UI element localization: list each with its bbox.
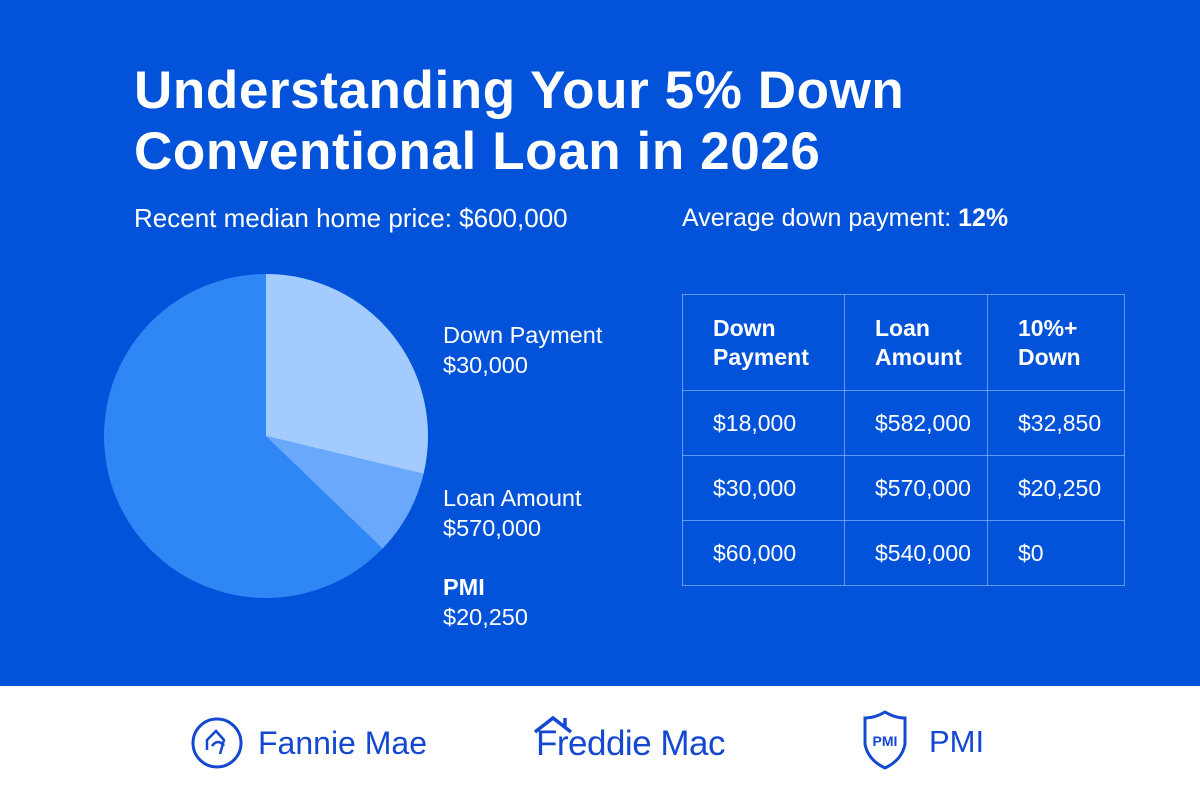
- logo: Fannie Mae: [192, 718, 427, 768]
- table: $0: [1018, 540, 1044, 566]
- logo: Fannie Mae: Fannie Mae: [258, 725, 427, 761]
- logo: PMI: PMI: [873, 733, 897, 749]
- table: $540,000: [875, 540, 971, 566]
- table: [682, 294, 1125, 586]
- table: Down: [1018, 344, 1081, 370]
- label: PMI: $20,250: [443, 604, 528, 630]
- stat: median home price: Recent median home price: $600,000: [134, 203, 568, 233]
- logo: Freddie Mac: Freddie Mac: [536, 724, 725, 763]
- table: Down: [713, 314, 776, 340]
- table: Amount: [875, 344, 962, 370]
- table: Payment: [713, 344, 809, 370]
- table: 10%+: [1018, 314, 1077, 340]
- pie chart: [104, 274, 428, 598]
- table: $30,000: [713, 474, 796, 500]
- label: PMI: PMI: [443, 574, 485, 600]
- label: down payment: $30,000: [443, 352, 528, 378]
- logo: PMI: [864, 710, 984, 770]
- title: Understanding Your 5% Down: [134, 61, 904, 120]
- logo: PMI: PMI: [929, 724, 984, 759]
- table: $20,250: [1018, 474, 1101, 500]
- title: Conventional Loan in 2026: [134, 122, 820, 181]
- table: $582,000: [875, 410, 971, 436]
- table: $32,850: [1018, 410, 1101, 436]
- label: down payment: [443, 322, 602, 378]
- label: loan amount: [443, 485, 582, 541]
- label: loan amount: Loan Amount: [443, 485, 582, 511]
- table: $18,000: [713, 410, 796, 436]
- label: loan amount: $570,000: [443, 515, 541, 541]
- table: Loan: [875, 314, 930, 340]
- table: $570,000: [875, 474, 971, 500]
- label: PMI: [443, 574, 528, 630]
- table: $60,000: [713, 540, 796, 566]
- title: [134, 61, 904, 181]
- stat: average down payment: Average down payment: 12%: [682, 204, 1008, 232]
- label: down payment: Down Payment: [443, 322, 602, 348]
